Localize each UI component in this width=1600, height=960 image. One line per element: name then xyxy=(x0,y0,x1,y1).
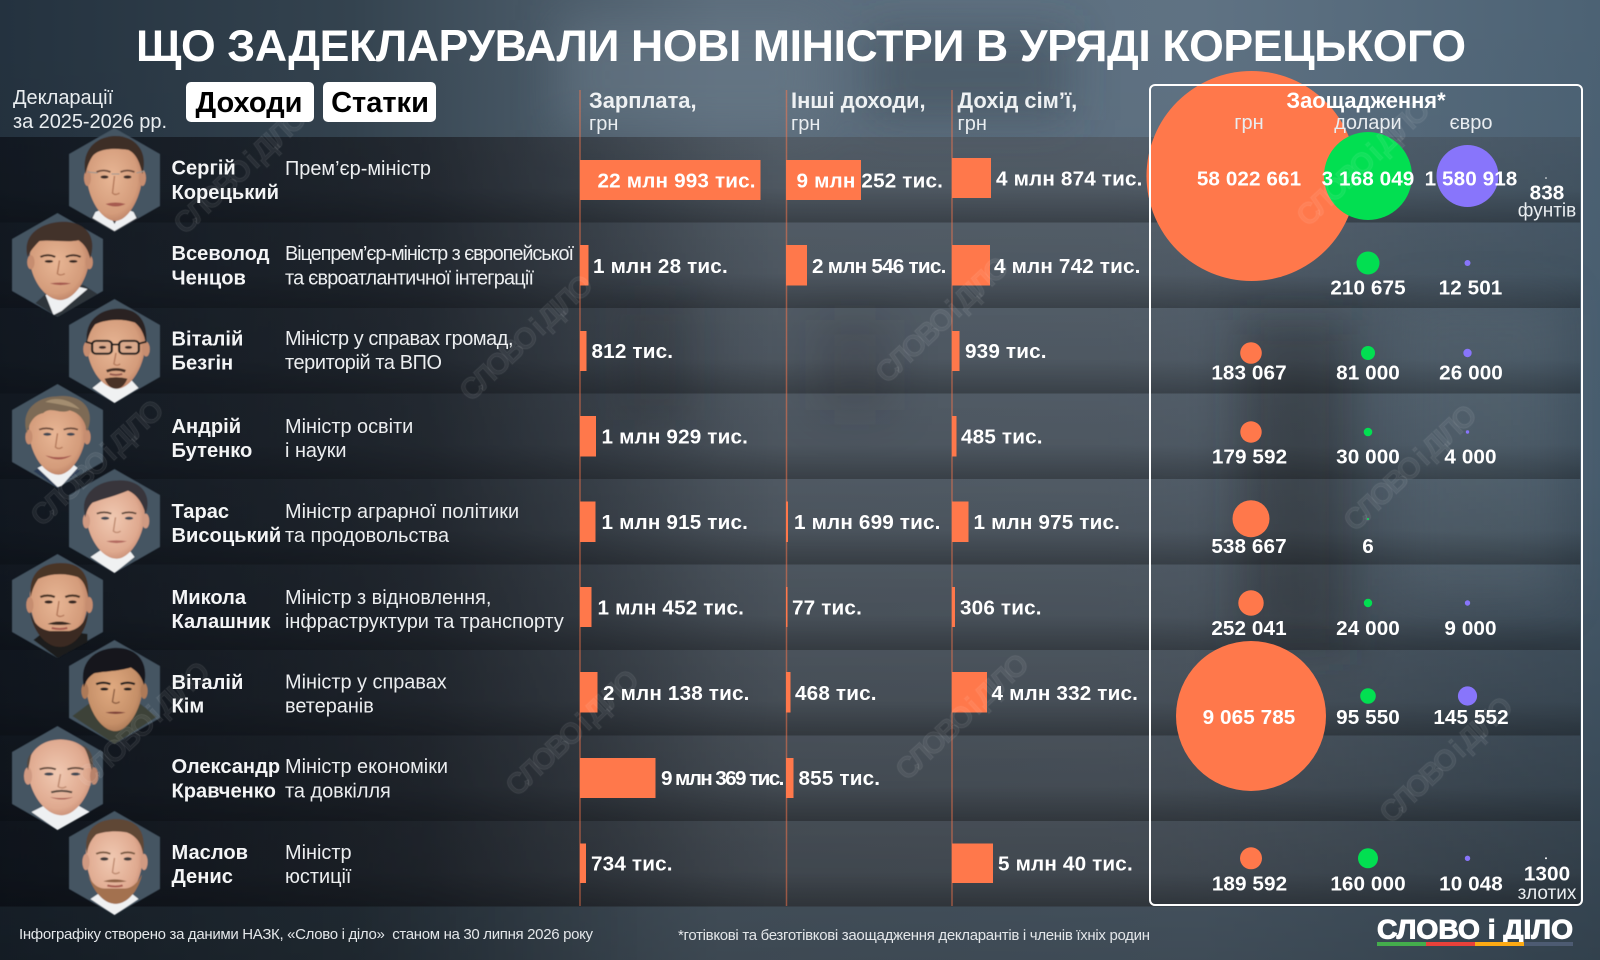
family income value: 4 млн 742 тис. xyxy=(994,255,1141,278)
portrait: Андрій Бутенко xyxy=(12,384,103,488)
footer: source note: Інфографіку створено за даними НАЗК, «Слово і діло» станом на 30 липня 2026 року xyxy=(19,926,594,943)
name: Бутенко xyxy=(172,440,252,462)
name: Всеволод xyxy=(172,243,270,265)
bubbles: dollars xyxy=(1324,132,1412,868)
watermarks: СЛОВО і ДІЛО xyxy=(499,663,646,803)
salary value: 1 млн 28 тис. xyxy=(593,255,728,278)
name: Висоцький xyxy=(172,525,281,547)
salary bar xyxy=(580,502,596,542)
role xyxy=(285,672,447,718)
watermarks: СЛОВО і ДІЛО xyxy=(1373,690,1520,830)
column header: salary xyxy=(589,88,697,135)
row: Сергій Корецький xyxy=(69,128,1143,232)
title: ЩО ЗАДЕКЛАРУВАЛИ НОВІ МІНІСТРИ В УРЯДІ КОРЕЦЬКОГО xyxy=(136,22,1466,71)
role xyxy=(285,842,352,888)
role: територій та ВПО xyxy=(285,352,442,374)
savings heading: Заощадження* xyxy=(1286,88,1446,113)
watermarks: СЛОВО і ДІЛО xyxy=(453,268,600,408)
savings values: hryvnia: 58 022 661 xyxy=(1197,168,1301,190)
savings values: euro: 1 580 918 xyxy=(1425,168,1517,190)
savings values: euro: 4 000 xyxy=(1444,446,1497,468)
name xyxy=(172,587,271,633)
family income bar xyxy=(952,587,955,627)
role: Міністр економіки xyxy=(285,756,448,778)
column header: family income: Дохід сім’ї, xyxy=(958,88,1077,113)
savings values: dollars: 81 000 xyxy=(1336,362,1400,384)
tab: articles xyxy=(323,82,436,122)
column header: family income: грн xyxy=(958,113,987,135)
bubbles: hryvnia xyxy=(1146,71,1356,869)
other income bar xyxy=(786,758,794,798)
family income value: 4 млн 874 тис. xyxy=(996,168,1143,190)
role: Міністр у справах громад, xyxy=(285,328,514,350)
column header: other income xyxy=(791,88,926,135)
savings values: euro: 26 000 xyxy=(1439,362,1503,384)
savings values: euro: 12 501 xyxy=(1439,276,1502,300)
currency labels: долари xyxy=(1334,112,1402,134)
tab: incomes xyxy=(186,82,314,122)
footer: savings footnote: *готівкові та безготівкові заощадження декларантів і членів їхніх родин xyxy=(678,927,1150,944)
column header: other income: Інші доходи, xyxy=(791,88,926,113)
savings values: hryvnia xyxy=(1197,168,1301,896)
column header: salary: грн xyxy=(589,113,618,135)
role xyxy=(285,243,574,290)
watermarks: СЛОВО і ДІЛО xyxy=(167,101,314,241)
name xyxy=(172,842,248,888)
savings values: dollars: 3 168 049 xyxy=(1322,168,1414,190)
name xyxy=(172,756,280,802)
savings values: zloty: 1300 xyxy=(1524,862,1570,886)
family income value: 939 тис. xyxy=(965,340,1047,363)
role: Прем’єр-міністр xyxy=(285,158,431,180)
name xyxy=(172,158,279,204)
column header: other income: грн xyxy=(791,113,820,135)
role: Міністр аграрної політики xyxy=(285,501,519,523)
name: Маслов xyxy=(172,842,248,864)
panel: savings xyxy=(1146,71,1582,905)
name: Микола xyxy=(172,587,247,609)
name: Тарас xyxy=(172,501,229,523)
portrait: Тарас Висоцький xyxy=(69,469,160,573)
other income bar xyxy=(786,160,861,200)
other income bar xyxy=(786,245,807,286)
name xyxy=(172,328,243,374)
savings values: hryvnia: 179 592 xyxy=(1212,446,1287,468)
other income value: 2 млн 546 тис. xyxy=(812,255,946,278)
role: і науки xyxy=(285,440,347,462)
other income value: 468 тис. xyxy=(795,682,877,705)
row: Всеволод Ченцов xyxy=(12,213,1141,317)
family income bar xyxy=(952,245,990,286)
salary bar xyxy=(580,672,598,712)
salary value: 22 млн 993 тис. xyxy=(598,170,756,192)
row: Маслов Денис xyxy=(69,811,1133,915)
role: інфраструктури та транспорту xyxy=(285,611,564,633)
savings values: euro: 145 552 xyxy=(1433,706,1509,729)
name: Денис xyxy=(172,866,233,888)
family income value: 306 тис. xyxy=(960,596,1042,620)
name: Безгін xyxy=(172,352,233,374)
watermarks xyxy=(24,93,1520,830)
savings values: euro: 10 048 xyxy=(1439,872,1503,896)
declarations note: за 2025-2026 рр. xyxy=(13,111,167,133)
row: Віталій Безгін xyxy=(69,299,1047,403)
other income value: 9 млн 252 тис. xyxy=(796,170,943,192)
row: Олександр Кравченко xyxy=(12,726,880,830)
savings values: dollars: 160 000 xyxy=(1330,872,1406,896)
name xyxy=(172,243,270,290)
name: Калашник xyxy=(172,611,271,633)
role: Міністр з відновлення, xyxy=(285,587,491,609)
role: ветеранів xyxy=(285,696,374,718)
column divider lines xyxy=(580,90,952,906)
savings values: zloty: злотих xyxy=(1518,883,1577,904)
role xyxy=(285,328,514,374)
family income bar xyxy=(952,416,956,456)
salary value: 1 млн 929 тис. xyxy=(602,426,748,448)
portrait: Віталій Кім xyxy=(69,640,160,744)
other income bar xyxy=(786,587,788,627)
family income bar xyxy=(952,672,987,712)
salary bar xyxy=(580,587,592,627)
salary bar xyxy=(580,416,596,456)
declarations note xyxy=(13,87,167,133)
salary value: 2 млн 138 тис. xyxy=(603,682,750,705)
name: Кім xyxy=(172,696,204,718)
salary value: 1 млн 452 тис. xyxy=(598,596,744,620)
savings values: pounds: фунтів xyxy=(1518,200,1576,222)
family income bar xyxy=(952,158,991,198)
name xyxy=(172,501,281,547)
savings values: pounds xyxy=(1518,182,1576,222)
salary value: 9 млн 369 тис. xyxy=(661,767,784,790)
row: Віталій Кім xyxy=(69,640,1138,744)
row: Андрій Бутенко xyxy=(12,384,1043,488)
portrait: Віталій Безгін xyxy=(69,299,160,403)
other income value: 1 млн 699 тис. xyxy=(794,511,941,534)
portrait: Микола Калашник xyxy=(12,554,103,658)
other income bar xyxy=(786,502,788,542)
savings frame xyxy=(1150,85,1582,905)
name: Кравченко xyxy=(172,780,276,802)
declarations note: Декларації xyxy=(13,87,114,109)
savings values: hryvnia: 183 067 xyxy=(1211,362,1287,384)
salary value: 1 млн 915 тис. xyxy=(602,511,748,534)
watermarks: СЛОВО і ДІЛО xyxy=(1337,398,1484,538)
family income value: 4 млн 332 тис. xyxy=(992,682,1138,705)
role: Міністр освіти xyxy=(285,416,413,438)
salary bar xyxy=(580,160,760,200)
salary bar xyxy=(580,331,586,371)
family income value: 5 млн 40 тис. xyxy=(998,852,1133,876)
savings values: euro: 9 000 xyxy=(1444,617,1497,640)
role xyxy=(285,756,448,802)
portrait: Олександр Кравченко xyxy=(12,726,103,830)
name xyxy=(172,672,243,718)
salary bar xyxy=(580,844,586,883)
salary bar xyxy=(580,245,588,286)
name: Корецький xyxy=(172,182,279,204)
watermarks: СЛОВО і ДІЛО xyxy=(24,393,171,533)
logo: Слово і діло: СЛОВО і ДІЛО xyxy=(1377,914,1573,944)
role xyxy=(285,416,413,462)
salary bar xyxy=(580,758,656,798)
watermarks: СЛОВО і ДІЛО xyxy=(70,655,217,795)
name: Сергій xyxy=(172,158,236,180)
watermarks: СЛОВО і ДІЛО xyxy=(869,250,1016,390)
watermarks: СЛОВО і ДІЛО xyxy=(889,647,1036,787)
column header: salary: Зарплата, xyxy=(589,88,697,113)
savings values: pounds: 838 xyxy=(1530,182,1564,204)
family income bar xyxy=(952,502,968,542)
savings values: dollars: 210 675 xyxy=(1330,276,1406,300)
role xyxy=(285,501,519,547)
watermarks: СЛОВО і ДІЛО xyxy=(1290,93,1437,233)
savings values: dollars: 24 000 xyxy=(1336,617,1400,640)
row: Микола Калашник xyxy=(12,554,1042,658)
currency labels: євро xyxy=(1449,112,1493,134)
column header: family income xyxy=(958,88,1077,135)
savings values: dollars xyxy=(1322,168,1414,896)
savings values: hryvnia: 9 065 785 xyxy=(1203,706,1295,729)
savings values: dollars: 6 xyxy=(1362,535,1374,558)
tab: incomes: Доходи xyxy=(196,87,302,119)
role: та продовольства xyxy=(285,525,450,547)
bubbles: other currencies xyxy=(1545,177,1547,859)
portrait: Сергій Корецький xyxy=(69,128,160,232)
role: та довкілля xyxy=(285,780,391,802)
role: Міністр у справах xyxy=(285,672,447,694)
name: Ченцов xyxy=(172,268,246,290)
portrait: Маслов Денис xyxy=(69,811,160,915)
family income value: 1 млн 975 тис. xyxy=(974,511,1120,534)
role: Віцепрем’єр-міністр з європейської xyxy=(285,243,574,265)
currency labels: грн xyxy=(1234,112,1264,134)
other income value: 855 тис. xyxy=(798,767,880,790)
name: Віталій xyxy=(172,672,243,694)
savings values: hryvnia: 538 667 xyxy=(1211,535,1287,558)
savings values: dollars: 95 550 xyxy=(1336,706,1400,729)
name: Віталій xyxy=(172,328,243,350)
family income bar xyxy=(952,844,993,883)
role: юстиції xyxy=(285,866,352,888)
row: Тарас Висоцький xyxy=(69,469,1120,573)
savings values: zloty xyxy=(1518,862,1577,904)
bubbles: euro xyxy=(1436,145,1498,861)
salary value: 812 тис. xyxy=(592,340,673,363)
savings values: hryvnia: 252 041 xyxy=(1211,617,1287,640)
savings values: hryvnia: 189 592 xyxy=(1212,872,1287,896)
family income value: 485 тис. xyxy=(961,426,1043,448)
family income bar xyxy=(952,331,960,371)
role: та євроатлантичної інтеграції xyxy=(285,268,534,290)
currency labels xyxy=(1234,112,1493,134)
salary value: 734 тис. xyxy=(591,852,673,876)
savings values: dollars: 30 000 xyxy=(1336,446,1400,468)
portrait: Всеволод Ченцов xyxy=(12,213,103,317)
other income bar xyxy=(786,672,790,712)
savings values: euro xyxy=(1425,168,1517,896)
name: Олександр xyxy=(172,756,280,778)
role: Міністр xyxy=(285,842,352,864)
name xyxy=(172,416,252,462)
other income value: 77 тис. xyxy=(792,596,862,620)
role xyxy=(285,587,564,633)
name: Андрій xyxy=(172,416,241,438)
tab: articles: Статки xyxy=(331,87,429,119)
